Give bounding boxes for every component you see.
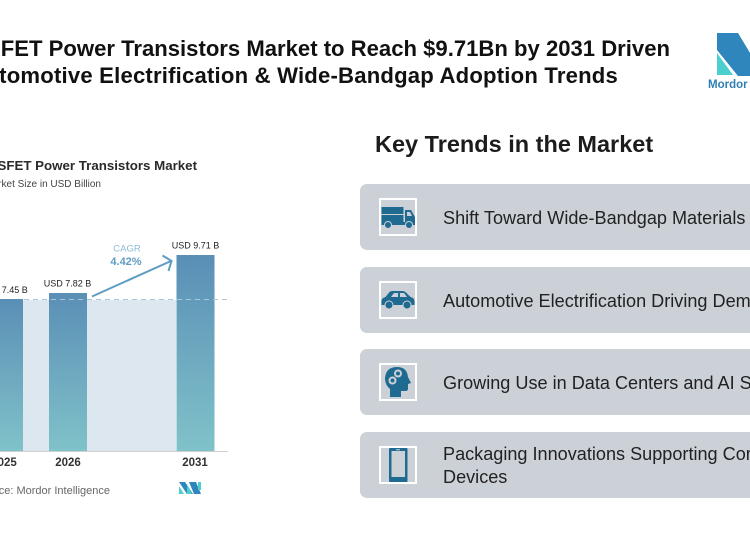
panel: wide-bandgap trend [360, 184, 750, 250]
arrow: CAGR [92, 256, 172, 296]
background band [23, 300, 176, 451]
small logo [179, 482, 201, 494]
value labels: USD 7.82 B [44, 278, 91, 288]
reference dashed line [24, 298, 230, 300]
CAGR label [110, 244, 142, 268]
label: Shift Toward Wide-Bandgap Materials [443, 208, 745, 228]
year labels: 2026 [55, 457, 81, 469]
panel: automotive electrification trend [360, 267, 750, 333]
label: Devices [443, 467, 507, 487]
value labels [0, 240, 219, 295]
CAGR label: 4.42% [110, 256, 142, 268]
icon: head with gears [379, 363, 417, 401]
CAGR label: CAGR [113, 244, 141, 254]
bar: 2026 [49, 293, 87, 451]
panel: data centers trend [360, 349, 750, 415]
year labels [0, 457, 208, 469]
title [0, 36, 670, 88]
value labels: USD 9.71 B [172, 240, 219, 250]
heading: key trends: Key Trends in the Market [375, 131, 653, 157]
panel: packaging trend [360, 432, 750, 498]
logo: Mordor Intelligence [708, 33, 750, 91]
icon: truck [379, 198, 417, 236]
bar: 2025 [0, 299, 23, 451]
bar chart [0, 158, 228, 497]
year labels: 2031 [182, 457, 208, 469]
icon: car [379, 281, 417, 319]
baseline [0, 450, 228, 452]
bar: 2031 [176, 255, 214, 451]
label [443, 444, 750, 487]
icon: smartphone [379, 446, 417, 484]
